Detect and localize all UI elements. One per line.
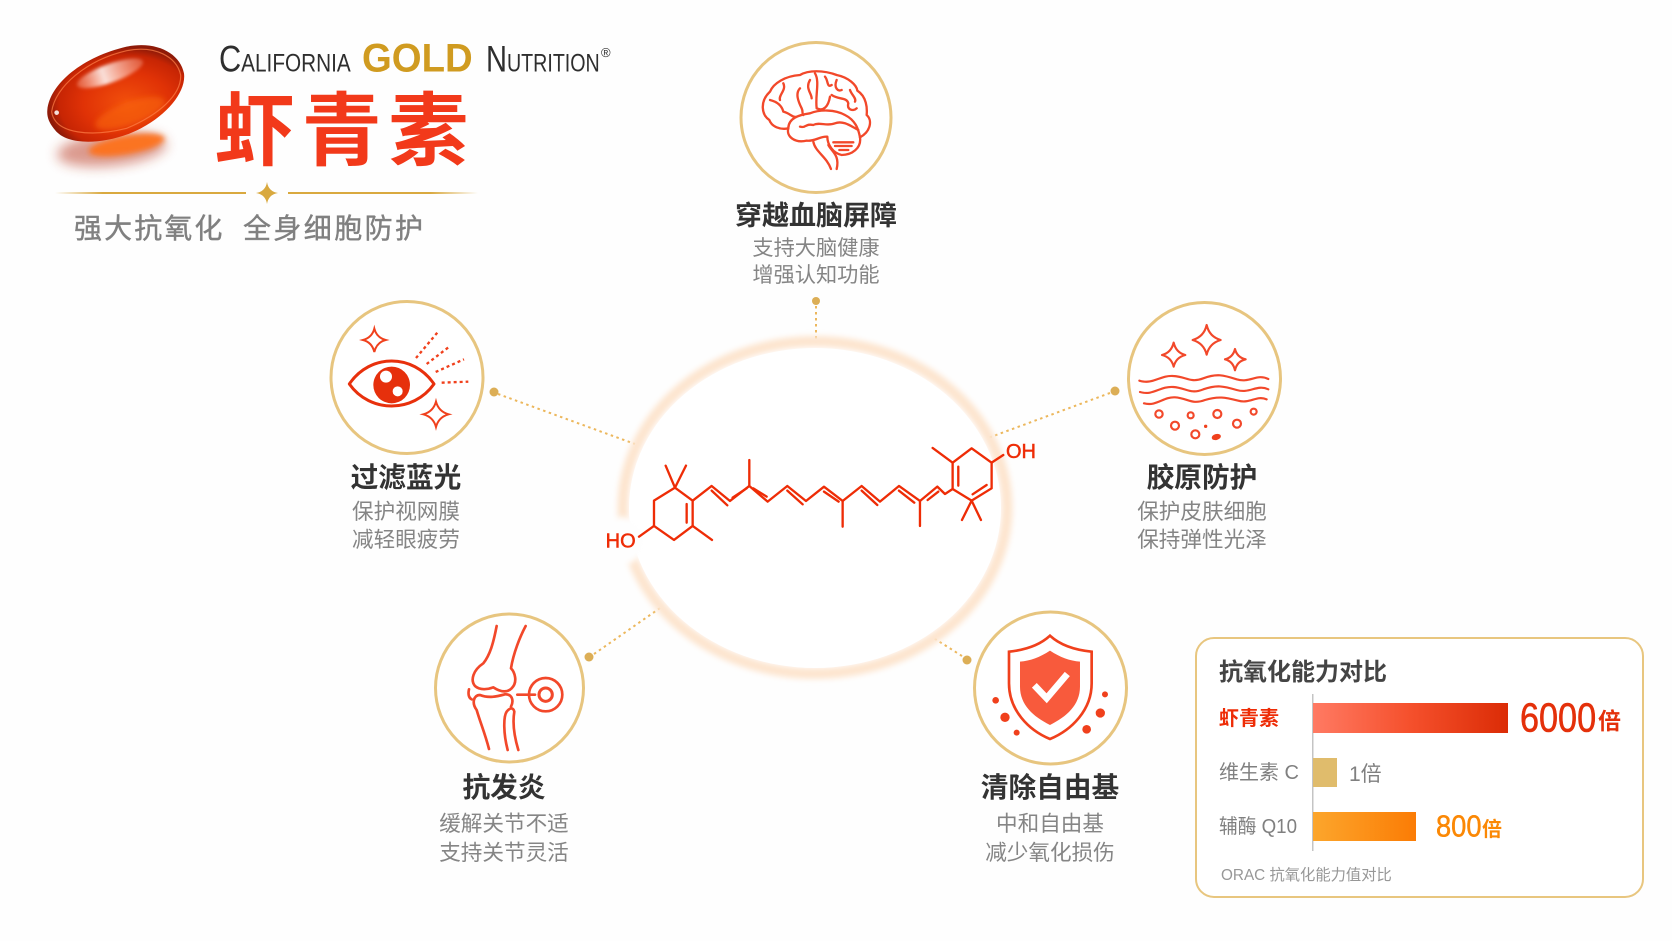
icon: knee joint with target (469, 626, 562, 750)
bar chart: 1倍 (1349, 763, 1382, 786)
bar chart: 虾青素 (1219, 707, 1279, 730)
feature: knee (436, 614, 584, 865)
icon: eye with blue light rays (349, 329, 468, 427)
panel heading: 抗氧化能力对比 (1219, 659, 1387, 686)
panel: antioxidant comparison (1196, 638, 1643, 897)
bar chart: 倍 (1482, 817, 1502, 841)
feature: collagen: 保护皮肤细胞 (1137, 499, 1267, 524)
feature: eye (331, 302, 483, 552)
connector lines and dots (490, 297, 1120, 664)
astaxanthin molecule: OH (1006, 441, 1036, 463)
feature: collagen (1128, 302, 1280, 552)
feature: eye: 减轻眼疲劳 (352, 527, 460, 552)
feature: collagen: 胶原防护 (1147, 462, 1257, 493)
feature: brain: 穿越血脑屏障 (735, 201, 897, 231)
central glowing ellipse (600, 342, 1007, 674)
feature: knee: 抗发炎 (462, 772, 546, 803)
icon: softgel capsule (47, 45, 184, 172)
bar chart: 倍 (1598, 708, 1621, 734)
brand name: California Gold Nutrition (219, 37, 611, 81)
icon: skin layers with sparkles (1139, 325, 1268, 441)
footnote: ORAC 抗氧化能力值对比 (1221, 867, 1392, 884)
bar chart (1219, 694, 1621, 851)
bar chart: 辅酶 Q10 (1219, 815, 1297, 838)
icon: brain (763, 71, 870, 169)
feature: shield: 中和自由基 (996, 811, 1104, 836)
astaxanthin molecule: HO (606, 531, 636, 553)
feature: brain: 支持大脑健康 (752, 236, 880, 260)
feature: shield: 减少氧化损伤 (985, 840, 1115, 865)
feature: knee: 缓解关节不适 (439, 811, 569, 836)
feature: shield (974, 612, 1126, 865)
feature: knee: 支持关节灵活 (439, 840, 569, 865)
bar chart: 800 (1436, 810, 1482, 844)
feature: eye: 保护视网膜 (352, 499, 460, 524)
feature: brain (735, 42, 897, 287)
brand name: California Gold Nutrition: CALIFORNIA (219, 39, 351, 80)
brand name: California Gold Nutrition: ® (601, 45, 611, 60)
brand name: California Gold Nutrition: NUTRITION (486, 39, 600, 80)
feature: eye: 过滤蓝光 (351, 462, 461, 493)
divider with gold star (55, 182, 478, 204)
feature: collagen: 保持弹性光泽 (1137, 527, 1267, 552)
astaxanthin molecule (606, 441, 1036, 553)
brand name: California Gold Nutrition: GOLD (362, 37, 473, 81)
icon: shield with check (992, 636, 1108, 739)
tagline (74, 213, 425, 244)
bar chart: 6000 (1520, 696, 1596, 741)
bar chart: 维生素 C (1219, 761, 1299, 784)
tagline: 强大抗氧化 (74, 213, 225, 244)
feature: brain: 增强认知功能 (752, 263, 880, 287)
main title: 虾青素 (215, 87, 475, 176)
tagline: 全身细胞防护 (243, 213, 425, 244)
feature: shield: 清除自由基 (981, 772, 1120, 803)
